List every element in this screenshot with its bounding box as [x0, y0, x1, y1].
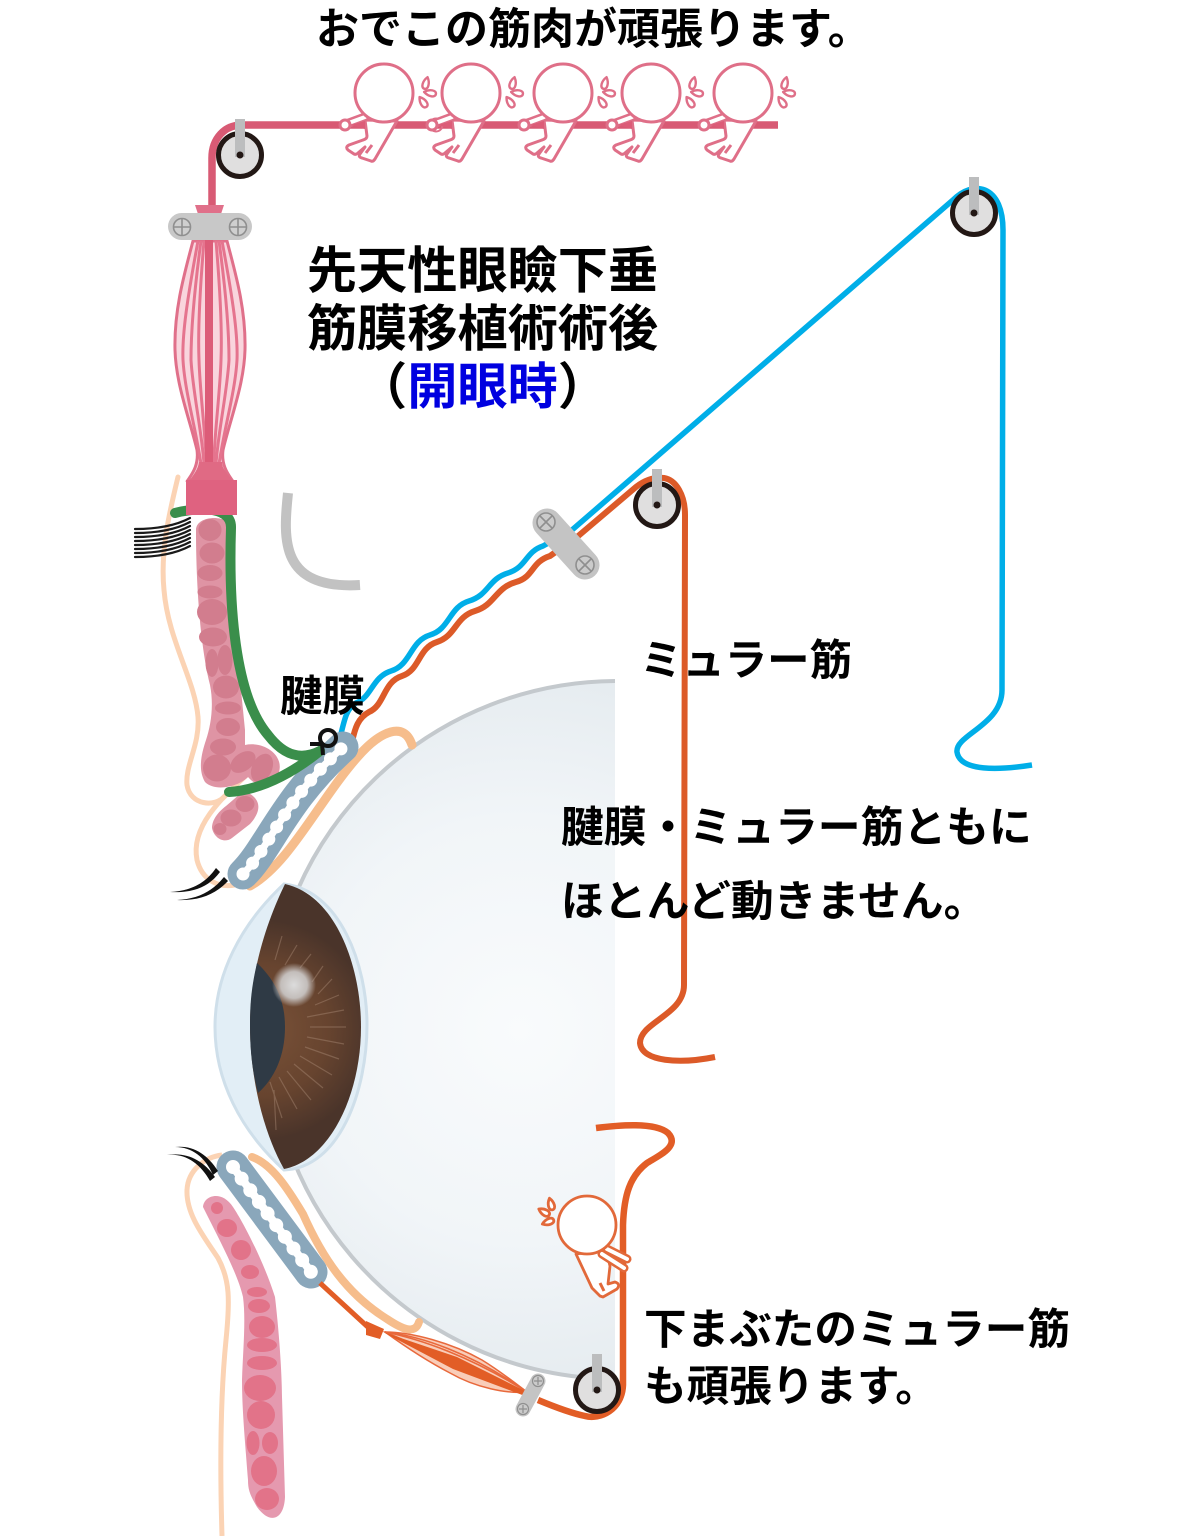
label: aponeurosis: 腱膜 — [280, 674, 365, 721]
orange figure pulling rope — [537, 1196, 627, 1297]
tug of war figure 1 — [340, 64, 436, 161]
label: Müller muscle: ミュラー筋 — [640, 637, 852, 684]
upper tarsus plate — [243, 747, 343, 874]
title — [307, 243, 658, 415]
cornea and iris — [215, 884, 367, 1170]
upper orange lid layer — [250, 731, 412, 886]
note: lower lid Müller — [644, 1306, 1070, 1411]
title: （開眼時） — [357, 359, 608, 415]
hook knot — [310, 730, 336, 755]
upper lashes — [135, 518, 190, 557]
lower lashes — [167, 1147, 218, 1181]
tug of war figure 4 — [607, 64, 703, 161]
lower tarsus plate — [233, 1167, 311, 1272]
lower small clamp — [518, 1376, 544, 1414]
upper levator muscle tissue — [196, 518, 280, 840]
top pulley — [218, 119, 262, 176]
lower skin outline — [187, 1155, 228, 1536]
tendon and Müller rope waves: blue line — [340, 188, 1032, 768]
note: lower lid Müller: も頑張ります。 — [644, 1363, 938, 1411]
frontalis clamp — [168, 205, 252, 240]
heading: forehead muscle: おでこの筋肉が頑張ります。 — [316, 6, 871, 54]
note: lower lid Müller: 下まぶたのミュラー筋 — [644, 1306, 1070, 1354]
green tendon (aponeurosis) arrows — [175, 509, 320, 792]
upper lid skin outline — [163, 477, 250, 886]
blue line pulley — [952, 177, 996, 234]
lower Müller muscle — [320, 1283, 527, 1396]
title: 先天性眼瞼下垂 — [307, 243, 658, 299]
frontalis muscle — [175, 240, 245, 480]
gray eyelid crease curve — [286, 493, 360, 585]
note: neither moves — [561, 804, 1032, 926]
pink muscle base block — [186, 480, 237, 515]
title: 筋膜移植術術後 — [307, 301, 658, 357]
lower orange rope — [538, 1125, 672, 1417]
tug of war figure 3 — [519, 64, 615, 161]
diagonal clamp on ropes — [537, 513, 594, 574]
lower lid muscle tissue — [203, 1196, 285, 1518]
note: neither moves: 腱膜・ミュラー筋ともに — [561, 804, 1032, 852]
Müller muscle rope: orange line — [352, 478, 715, 1061]
tug of war figure 5 — [699, 64, 795, 161]
eyeball sclera — [266, 681, 615, 1379]
note: neither moves: ほとんど動きません。 — [561, 878, 986, 926]
lower orange lid layer — [252, 1157, 419, 1329]
orange line pulley — [636, 469, 678, 526]
tug of war figure 2 — [427, 64, 523, 161]
pink rope over top pulley — [212, 125, 778, 212]
lower pulley — [576, 1354, 618, 1412]
upper short lashes — [170, 868, 228, 900]
